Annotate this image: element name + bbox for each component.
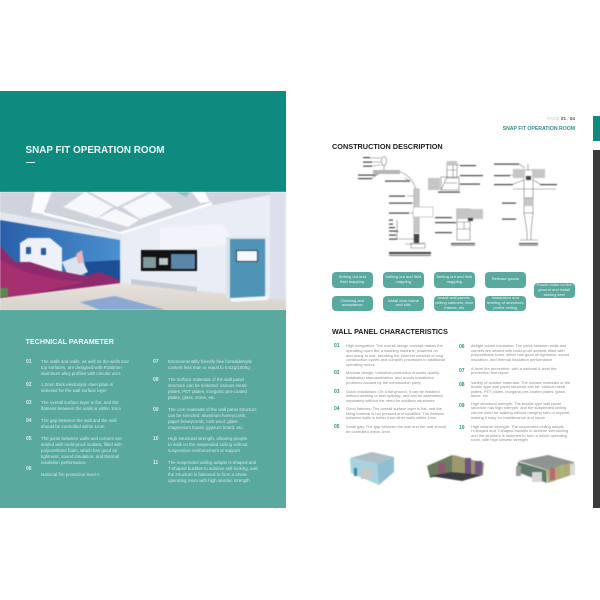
flow step: cleaning and acceptance: [332, 296, 373, 311]
item 08: plates, glass, stone, etc.: [168, 395, 216, 400]
item 10: [153, 436, 248, 453]
item 08: [153, 377, 247, 400]
item 02: selected for the wall surface layer: [41, 388, 107, 393]
flow step: setting out 2: Setting out and field: [385, 274, 421, 279]
flow step: cleaning and acceptance: acceptance: [342, 302, 363, 307]
item 06: [26, 466, 100, 477]
characteristic 09: 09: [459, 403, 465, 409]
item 03: The overall surface layer is flat, and the: [41, 400, 118, 405]
model: room with equipment: [516, 455, 575, 483]
panel: teal header: [0, 91, 286, 192]
characteristic 08: Variety of surface materials: The surface materials of the: [471, 380, 570, 385]
item 09: 09: [153, 407, 159, 413]
characteristic 10: High seismic strength: The suspended ceiling adopts: [471, 424, 564, 429]
panel: technical parameter: [0, 310, 286, 508]
characteristic 01: and ready to use, breaking the inherent concept of long: [346, 353, 443, 358]
characteristic 03: 03: [334, 389, 340, 395]
characteristic 03: separately without the need for auxiliary structures: [346, 398, 434, 403]
flow step: ceiling installation: Installation and: [492, 295, 519, 300]
characteristic 08: 08: [459, 382, 465, 388]
characteristic 04: Good flatness: The overall surface layer is flat, and the: [346, 406, 442, 411]
characteristic 05: 05: [334, 424, 340, 430]
characteristic 06: corners are sealed with mold-proof sealant, filled with: [471, 348, 565, 353]
item 02: 1.2mm thick electrolytic steel plate is: [41, 382, 113, 387]
item 05: 05: [26, 436, 32, 442]
characteristic 10: [459, 424, 569, 442]
characteristic 08: [459, 380, 570, 398]
item 09: The core materials of the wall panel structure: [168, 407, 257, 412]
flow step: install door frame: [382, 296, 424, 311]
heading: construction description: CONSTRUCTION DESCRIPTION: [332, 142, 443, 151]
model: striped room: [427, 455, 484, 481]
characteristic 06: [459, 343, 569, 362]
characteristic 10: H-shaped and T-shaped buckles to achieve self-locking,: [471, 428, 569, 433]
page number: PAGE 01 / 04: [547, 116, 575, 121]
item 02: [26, 382, 113, 393]
item 11: the structure is fastened to form a whole: [168, 472, 247, 477]
item 10: 10: [153, 436, 159, 442]
item 06: National fire protection level A: [41, 472, 100, 477]
characteristic 02: installation standardization, and avoids installation: [346, 375, 434, 380]
characteristic 01: construction cycles and complex processes in traditional: [346, 357, 445, 362]
flow step: setting out 3: Setting out and field: [436, 274, 472, 279]
flow step: setting out 3: mapping: [446, 279, 462, 284]
characteristic 01: operating rooms: [346, 362, 375, 367]
flow step: install door frame: and sills: [396, 302, 411, 307]
flow step: install door frame: Install door frame: [388, 298, 419, 303]
characteristic 01: High integration: The overall design concept makes the: [346, 343, 443, 348]
flow step: punch holes: ground and install: [538, 287, 570, 292]
characteristic 02: problems caused by the construction party: [346, 380, 421, 385]
characteristic 07: A-level fire prevention: with a national A-level fire: [471, 366, 557, 371]
characteristic 06: 06: [459, 344, 465, 350]
item 10: High structural strength, allowing people: [168, 436, 247, 441]
characteristic 09: [459, 401, 570, 420]
item 01: top surfaces, are designed with R150mm: [41, 365, 122, 370]
item 03: flatness between the walls is within 1mm: [41, 406, 121, 411]
characteristic 06: polyurethane foam, which has good air tightness, sound: [471, 352, 569, 357]
flow step: setting out 1: Setting out and: [339, 274, 366, 279]
page subtitle: SNAP FIT OPERATION ROOM: [503, 126, 575, 132]
item 03: [26, 400, 121, 411]
characteristic 05: Small gap: The gap between the wall and the wall should: [346, 424, 446, 429]
item 07: Environmentally friendly free formaldehyde: [168, 359, 252, 364]
item 01: [26, 359, 129, 376]
title: SNAP FIT OPERATION ROOM: [26, 144, 164, 156]
item 05: polyurethane foam, which has good air: [41, 448, 117, 453]
item 11: [153, 460, 258, 483]
characteristic 07: [459, 366, 557, 375]
characteristic 10: room, with high seismic strength: [471, 437, 528, 442]
item 05: The joints between walls and corners are: [41, 436, 122, 441]
item 08: 08: [153, 377, 159, 383]
heading: technical parameter: TECHNICAL PARAMETER: [26, 336, 114, 346]
characteristic 04: 04: [334, 406, 340, 412]
characteristic 02: Modular design: Industrial production ensures quality,: [346, 370, 440, 375]
characteristic 02: 02: [334, 370, 340, 376]
item 01: The walls and walls, as well as the walls and: [41, 359, 129, 364]
characteristic 07: prevention test report: [471, 370, 509, 375]
photo: operating room interior: [0, 191, 286, 310]
flow step: ceiling installation: [484, 296, 526, 311]
item 08: plates, PET plates, inorganic pre-coated: [168, 389, 247, 394]
item 11: The suspended ceiling adopts H-shaped and: [168, 460, 256, 465]
characteristic 04: [334, 406, 444, 420]
item 08: The surface materials of the wall panel: [168, 377, 244, 382]
title underline: [26, 162, 35, 163]
flow step: install wall panels: frames, etc: [444, 305, 464, 310]
item 08: structure can be selected: various metal: [168, 383, 246, 388]
flow step: release goods: [484, 272, 526, 288]
flow step: cleaning and acceptance: Cleaning and: [340, 298, 364, 303]
item 09: can be selected: aluminum honeycomb,: [168, 413, 246, 418]
characteristic 09: can be used for walking without hanging bars or support,: [471, 410, 570, 415]
item 07: content less than or equal to 0.02g/1000g: [168, 365, 250, 370]
flow step: punch holes: Punch holes on the: [537, 282, 572, 287]
item 01: aluminum alloy profiles with circular arcs: [41, 371, 120, 376]
flow step: setting out 1: [332, 272, 373, 288]
characteristic 09: structure has high strength, and the suspended ceiling: [471, 405, 566, 410]
item 04: [26, 418, 116, 429]
characteristic 07: 07: [459, 368, 465, 374]
characteristic 04: filling material is hot pressed and solidified. The flatness: [346, 411, 444, 416]
flow step: setting out 3: [434, 272, 475, 288]
item 05: sealed with mold-proof sealant, filled with: [41, 442, 122, 447]
characteristic 06: insulation, and thermal insulation performance: [471, 357, 552, 362]
item 09: [153, 407, 257, 430]
item 11: 11: [153, 460, 158, 466]
item 01: 01: [26, 359, 32, 365]
side bar: dark: [593, 150, 600, 508]
item 09: magnesium board, gypsum board, etc.: [168, 425, 244, 430]
item 05: tightness, sound insulation, and thermal: [41, 454, 119, 459]
characteristic 05: be controlled within 1mm: [346, 429, 390, 434]
building models: [350, 452, 576, 486]
flow step: setting out 2: mapping: [395, 279, 411, 284]
characteristic 10: 10: [459, 425, 465, 431]
item 07: [153, 359, 252, 370]
flow step: install wall panels: Install wall panels,: [438, 295, 471, 300]
item 06: 06: [26, 466, 32, 472]
flow step: ceiling installation: profile ceiling: [493, 305, 517, 310]
item 02: 02: [26, 382, 32, 388]
construction drawing: [357, 156, 558, 257]
flow step: install wall panels: [434, 296, 475, 311]
item 11: operating room with high seismic strength: [168, 478, 250, 483]
flow step: setting out 1: field mapping: [340, 279, 364, 284]
item 04: 04: [26, 418, 32, 424]
flow step: punch holes: skirting keel: [544, 292, 565, 297]
characteristic 03: without welding or keel splicing, and can be assembled: [346, 393, 443, 398]
characteristic 10: and the structure is fastened to form a whole operating: [471, 433, 567, 438]
item 05: insulation performance: [41, 460, 86, 465]
characteristic 08: stone, etc: [471, 393, 488, 398]
characteristic 03: Quick installation: On a flat ground, it can be installed: [346, 389, 440, 394]
item 10: to walk on the suspended ceiling without: [168, 442, 247, 447]
characteristic 01: [334, 343, 445, 367]
item 03: 03: [26, 400, 32, 406]
characteristic 09: making it easy for maintenance and repair: [471, 415, 545, 420]
characteristic 04: between walls is better than other walls within 1mm: [346, 415, 436, 420]
characteristic 01: operating room like a washing machine, powered on: [346, 348, 438, 353]
flow step: release goods: Release goods: [492, 276, 519, 281]
flow step: ceiling installation: leveling of aluminum: [487, 300, 524, 305]
characteristic 01: 01: [334, 343, 340, 349]
characteristic 02: [334, 370, 440, 385]
flow step: install wall panels: ceiling cabinets, door: [435, 300, 473, 305]
flow step: punch holes: [534, 282, 575, 298]
item 05: [26, 436, 122, 465]
item 10: suspension reinforcement or support: [168, 448, 240, 453]
item 09: paper honeycomb, rock wool, glass: [168, 419, 238, 424]
side tab: teal: [593, 116, 600, 141]
characteristic 03: [334, 389, 443, 403]
heading: wall panel characteristics: WALL PANEL CHARACTERISTICS: [332, 328, 448, 336]
characteristic 05: [334, 424, 446, 434]
characteristic 08: buckle type wall panel structure can be: various metal: [471, 384, 565, 389]
characteristic 06: Airtight sound insulation: The joints between walls and: [471, 343, 566, 348]
item 11: T-shaped buckles to achieve self-locking, and: [168, 466, 258, 471]
item 07: 07: [153, 359, 159, 365]
characteristic 09: High structural strength: The buckle type wall panel: [471, 401, 561, 406]
characteristic 08: plates, PET plates, inorganic pre-coated plates, glass,: [471, 389, 566, 394]
item 04: should be controlled within 1mm: [41, 424, 104, 429]
flow step: setting out 2: [382, 272, 424, 288]
model: blue room: [350, 452, 394, 485]
item 04: The gap between the wall and the wall: [41, 418, 116, 423]
